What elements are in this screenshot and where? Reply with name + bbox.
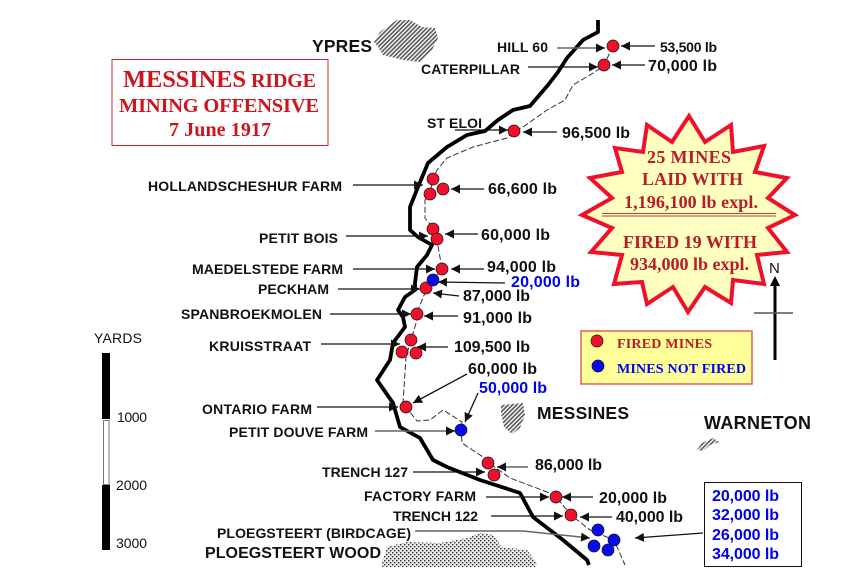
mine: Hill 60: 53,500 lb <box>660 39 717 55</box>
mine: Spanbroekmolen: 91,000 lb <box>463 310 532 327</box>
legend: MINES NOT FIRED <box>617 362 746 377</box>
mine: Trench 127: 86,000 lb <box>535 457 602 474</box>
mine: Hill 60: HILL 60 <box>497 39 548 55</box>
mine: Trench 122: TRENCH 122 <box>393 508 478 524</box>
mine: Hollandscheshur Farm: HOLLANDSCHESHUR FARM <box>148 178 342 194</box>
town: Messines: MESSINES <box>537 403 629 423</box>
Ploegsteert Wood <box>205 533 537 567</box>
front line: thick <box>377 20 598 565</box>
mine: Trench 127 <box>322 457 602 481</box>
title box: RIDGE <box>251 70 316 92</box>
mine: Hill 60 <box>497 39 717 55</box>
mine: Ontario Farm: ONTARIO FARM <box>202 401 312 417</box>
mine: Maedelstede Farm: 94,000 lb <box>487 259 556 276</box>
mine: Ploegsteert (Birdcage): PLOEGSTEERT (BIRDCAGE) <box>217 525 411 541</box>
mine: Petit Douve Farm <box>229 380 547 440</box>
mine line: dashed <box>403 46 625 565</box>
mine: Trench 122: 40,000 lb <box>616 509 683 526</box>
Ploegsteert Wood: PLOEGSTEERT WOOD <box>205 545 381 562</box>
town: Warneton: WARNETON <box>704 413 811 433</box>
mine: Spanbroekmolen: SPANBROEKMOLEN <box>181 306 322 322</box>
mine: Peckham: PECKHAM <box>258 281 329 297</box>
scale bar: 3000 <box>116 535 147 551</box>
mine: Trench 127: TRENCH 127 <box>322 464 408 480</box>
mine: Spanbroekmolen <box>181 306 532 327</box>
mine: Peckham: 20,000 lb <box>511 274 580 291</box>
mine: Petit Bois: PETIT BOIS <box>259 230 338 246</box>
scale bar: 1000 <box>117 409 147 425</box>
north arrow <box>754 260 793 360</box>
mine: Trench 122 <box>393 508 683 526</box>
callout: Ploegsteert charges: 32,000 lb <box>712 507 779 524</box>
mine: St Eloi <box>427 115 630 142</box>
mine: Maedelstede Farm: MAEDELSTEDE FARM <box>192 261 343 277</box>
starburst: mine totals: 25 MINES <box>647 147 731 167</box>
scale bar: YARDS <box>94 330 142 346</box>
mine: Peckham: 87,000 lb <box>463 288 530 305</box>
mine: Factory Farm: FACTORY FARM <box>364 488 476 504</box>
mine: Hollandscheshur Farm <box>148 173 557 200</box>
starburst: mine totals <box>582 116 795 312</box>
starburst: mine totals: LAID WITH <box>642 169 743 189</box>
mine: Ploegsteert (Birdcage) <box>217 524 620 556</box>
callout: Ploegsteert charges: 34,000 lb <box>712 546 779 563</box>
mine: Hollandscheshur Farm: 66,600 lb <box>488 181 557 198</box>
mine: Peckham <box>258 274 580 305</box>
callout: Ploegsteert charges: 20,000 lb <box>712 488 779 505</box>
mine: St Eloi: 96,500 lb <box>562 125 630 142</box>
town: Ypres: YPRES <box>312 36 372 56</box>
town: Messines <box>501 403 629 434</box>
title box <box>112 60 328 146</box>
mine: St Eloi: ST ELOI <box>427 115 482 131</box>
mine: Factory Farm: 20,000 lb <box>599 490 667 507</box>
callout: Ploegsteert charges: 26,000 lb <box>712 527 779 544</box>
mine: Kruisstraat: 109,500 lb <box>454 339 530 356</box>
mine: Kruisstraat: KRUISSTRAAT <box>209 338 311 354</box>
scale bar <box>94 330 147 551</box>
callout: Ploegsteert charges <box>635 482 802 566</box>
mine: Petit Bois: 60,000 lb <box>481 227 550 244</box>
starburst: mine totals: 1,196,100 lb expl. <box>624 192 758 212</box>
town: Warneton <box>697 413 811 451</box>
mine: Caterpillar: CATERPILLAR <box>421 61 520 77</box>
mine: Caterpillar <box>421 58 717 77</box>
title box: MINING OFFENSIVE <box>119 95 319 117</box>
starburst: mine totals: 934,000 lb expl. <box>630 254 749 274</box>
title box: 7 June 1917 <box>169 119 271 141</box>
mine: Caterpillar: 70,000 lb <box>648 58 717 75</box>
starburst: mine totals: FIRED 19 WITH <box>623 232 757 252</box>
scale bar: 2000 <box>116 477 147 493</box>
mine: Petit Douve Farm: PETIT DOUVE FARM <box>229 424 368 440</box>
mine: Petit Bois <box>259 223 550 246</box>
mine: Petit Douve Farm: 50,000 lb <box>479 380 547 397</box>
legend: FIRED MINES <box>617 337 712 352</box>
mine: Kruisstraat <box>209 334 530 359</box>
mine: Ontario Farm: 60,000 lb <box>468 361 537 378</box>
legend <box>581 331 752 384</box>
mine: Ontario Farm <box>202 361 537 417</box>
north arrow: N <box>769 260 780 277</box>
mine: Maedelstede Farm <box>192 259 556 277</box>
mine: Factory Farm <box>364 488 667 507</box>
title box: MESSINES <box>123 66 246 93</box>
town: Ypres <box>312 20 438 62</box>
